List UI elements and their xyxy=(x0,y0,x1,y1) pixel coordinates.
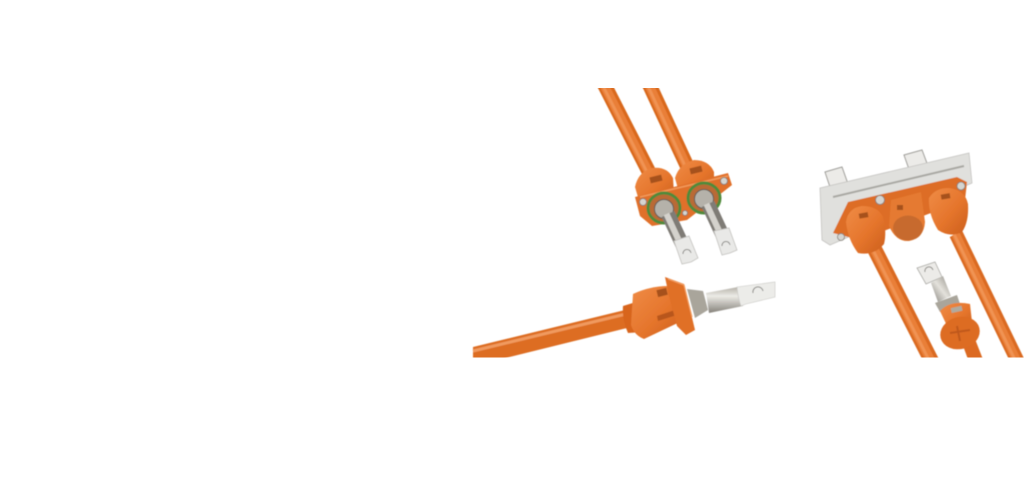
housings xyxy=(846,188,968,254)
panel connector: right xyxy=(820,150,1018,362)
small connector: lower right xyxy=(917,262,984,362)
cable xyxy=(473,310,631,366)
lug xyxy=(737,282,775,306)
flange xyxy=(833,177,967,240)
screws xyxy=(640,178,728,216)
connector pair: top centre xyxy=(602,84,737,264)
shaft xyxy=(931,276,951,302)
cable xyxy=(964,340,983,358)
cables xyxy=(872,234,1018,362)
metal collar xyxy=(935,295,960,312)
cables xyxy=(602,84,688,174)
flange xyxy=(635,173,732,226)
flange xyxy=(665,277,695,335)
screws xyxy=(838,182,965,240)
terminals xyxy=(654,190,714,218)
single connector: bottom centre xyxy=(473,277,775,366)
illustration: connector product renders xyxy=(472,88,1024,358)
collar xyxy=(687,289,708,318)
body xyxy=(940,302,972,324)
housings xyxy=(634,159,715,197)
seals xyxy=(648,183,720,223)
centre tube xyxy=(889,192,925,241)
rear lugs xyxy=(825,150,928,190)
mounting plate xyxy=(820,153,972,245)
collar xyxy=(940,318,980,350)
body xyxy=(631,286,684,339)
lug xyxy=(917,262,942,284)
lugs xyxy=(674,228,737,264)
neck xyxy=(622,302,636,334)
shaft xyxy=(706,287,743,313)
